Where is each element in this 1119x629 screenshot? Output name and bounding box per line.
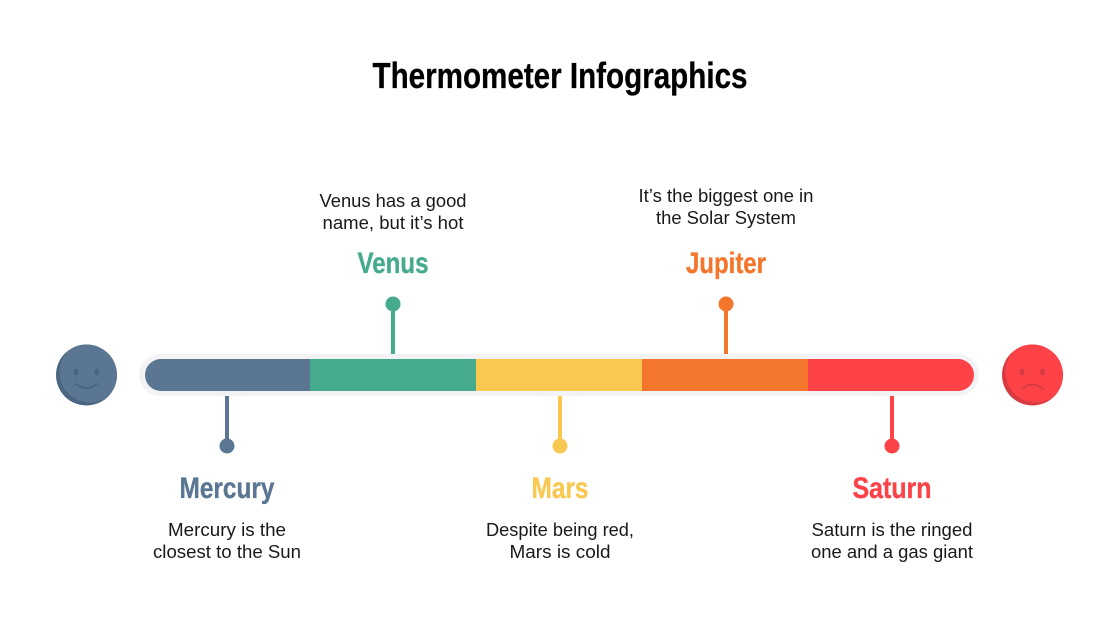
- text: Mercury description: closest to the Sun: [153, 541, 301, 562]
- text: Jupiter description: the Solar System: [656, 207, 796, 228]
- pin: Saturn: [884, 396, 900, 454]
- icon: happy face: [56, 342, 120, 406]
- text: Saturn description: [811, 519, 973, 562]
- text: Mars description: Mars is cold: [510, 541, 610, 562]
- heading: Mercury: Mercury: [180, 472, 275, 505]
- heading: Venus: Venus: [358, 247, 428, 280]
- heading: Saturn: Saturn: [852, 472, 932, 505]
- thermometer bar: [139, 354, 979, 396]
- text: Venus description: [320, 190, 466, 233]
- text: Mars description: Despite being red,: [486, 519, 634, 540]
- pin: Mars: [552, 396, 568, 454]
- text: Venus description: Venus has a good: [320, 190, 466, 211]
- icon: sad face: [1002, 342, 1066, 406]
- heading: Jupiter: Jupiter: [686, 247, 766, 280]
- text: Mercury description: [153, 519, 301, 562]
- text: Jupiter description: It’s the biggest one in: [638, 185, 814, 206]
- text: Jupiter description: [638, 185, 814, 228]
- pin: Jupiter: [718, 296, 734, 354]
- text: Saturn description: one and a gas giant: [811, 541, 973, 562]
- pin: Mercury: [220, 396, 234, 454]
- pin: Venus: [386, 296, 400, 354]
- text: Venus description: name, but it’s hot: [322, 212, 464, 233]
- text: Saturn description: Saturn is the ringed: [812, 519, 972, 540]
- title: Thermometer Infographics: [372, 55, 748, 96]
- text: Mars description: [486, 519, 634, 562]
- heading: Mars: Mars: [532, 472, 588, 505]
- text: Mercury description: Mercury is the: [168, 519, 286, 540]
